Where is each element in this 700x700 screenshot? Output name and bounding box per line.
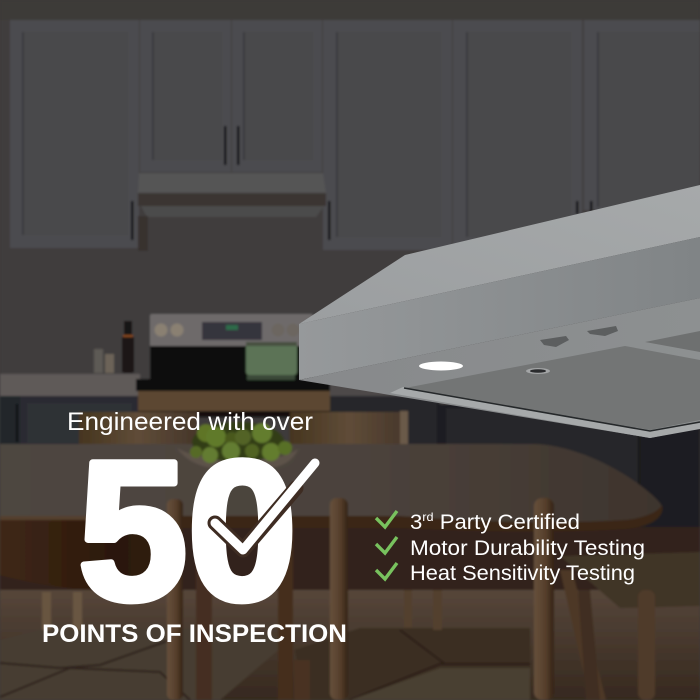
second filter: [645, 331, 700, 352]
hood top face: [299, 185, 700, 324]
check mark icon: [215, 463, 315, 550]
item: 3rd party certified: Party Certified: [434, 511, 580, 534]
counter and lower cabinets: [0, 374, 700, 558]
big number 50 with check mark: 50: [78, 420, 297, 641]
bottle and jars: [94, 321, 134, 373]
item: 3rd party certified: [376, 510, 580, 534]
hood front face: [299, 237, 700, 380]
stove: [136, 314, 330, 417]
wall: [0, 0, 700, 400]
green pot: [246, 342, 297, 380]
light: [419, 362, 463, 370]
floor: [0, 590, 700, 700]
chair backs behind table: [79, 411, 408, 446]
bowl of green apples: [177, 422, 298, 470]
chair posts and legs: [42, 498, 655, 700]
small range hood in background: [138, 173, 326, 251]
table: [0, 444, 662, 529]
control buttons: [540, 336, 569, 347]
upper cabinets: [10, 20, 700, 250]
feature checklist: [376, 510, 645, 585]
hood underside: [299, 298, 700, 438]
subheading: points of inspection: POINTS OF INSPECTION: [42, 620, 347, 648]
item: heat sensitivity testing: Heat Sensitivity Testing: [410, 562, 635, 585]
item: motor durability testing: Motor Durability Testing: [410, 537, 645, 560]
foreground stainless range hood: [299, 185, 700, 438]
item: 3rd party certified: rd: [422, 510, 434, 524]
woven chair seats: [0, 628, 290, 700]
heading: engineered with over: Engineered with over: [67, 408, 313, 436]
chair left back: [0, 517, 165, 590]
item: 3rd party certified: 3: [410, 511, 422, 534]
sensor: [526, 368, 550, 374]
grease filter: [405, 346, 700, 430]
handles: [224, 126, 226, 165]
